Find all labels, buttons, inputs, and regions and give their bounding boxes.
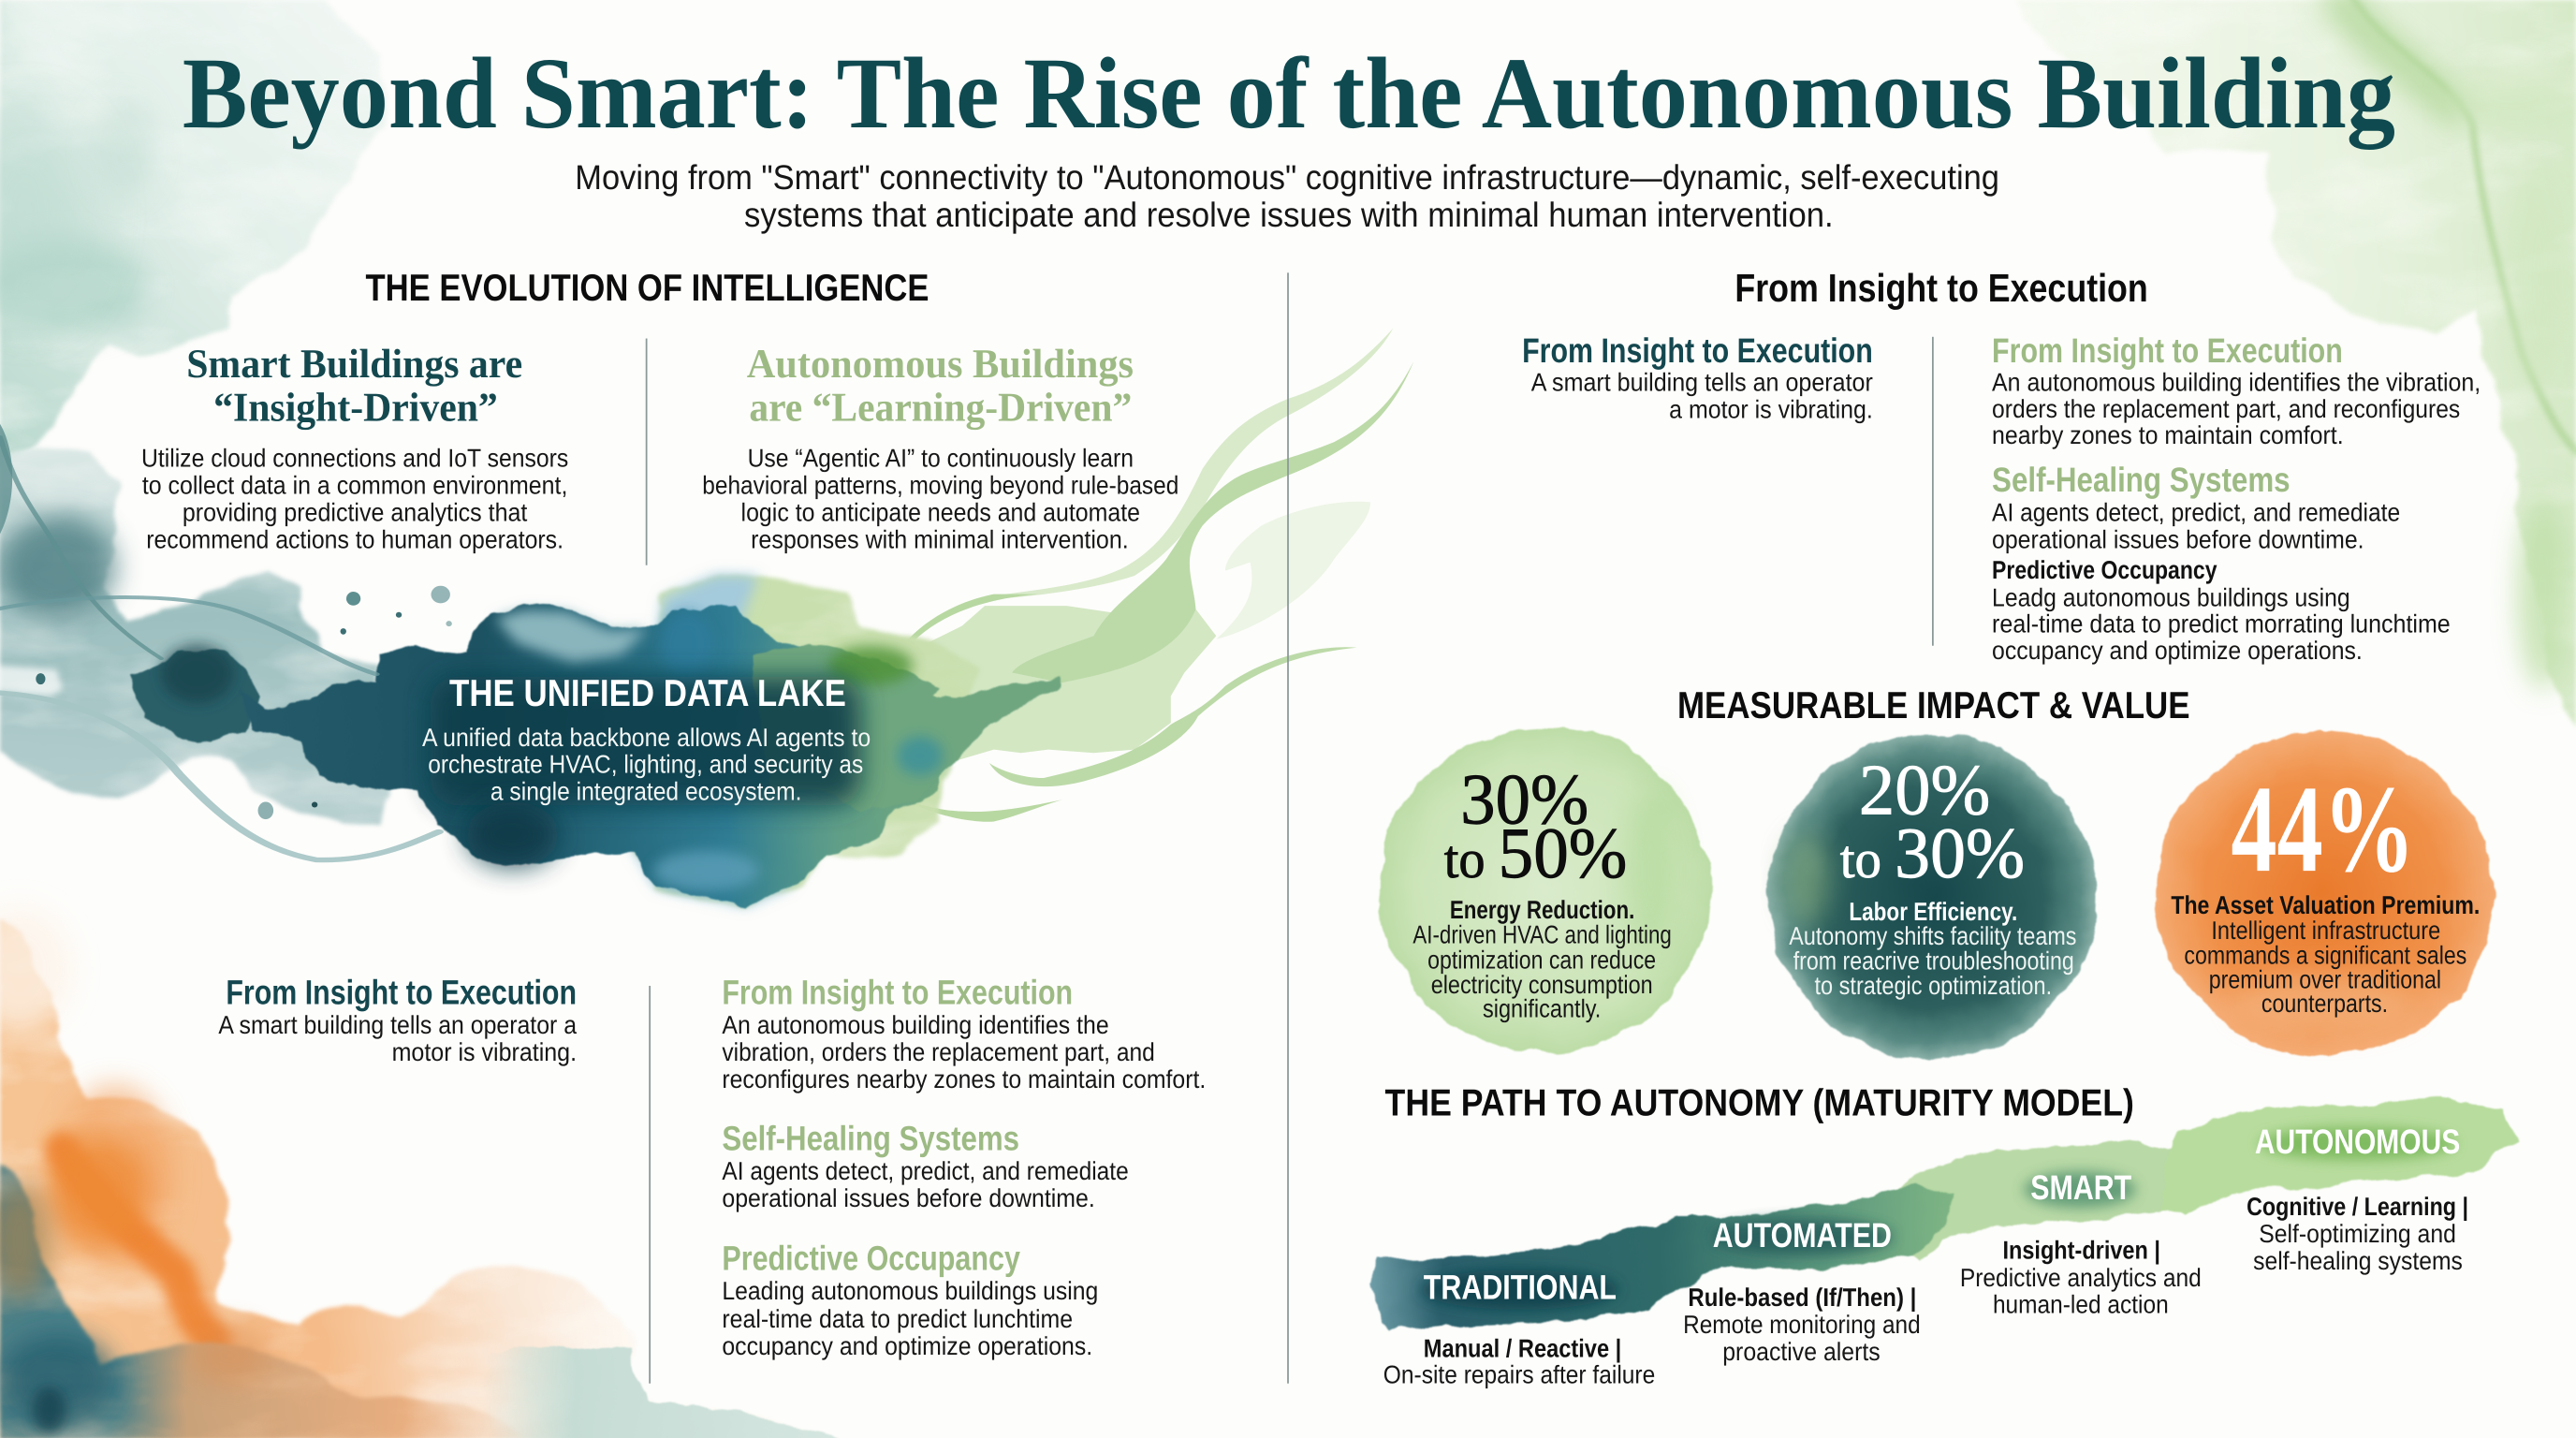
stat circle: labor efficiency: from reacrive troubleshooting	[1793, 948, 2074, 976]
left edge lens	[0, 424, 12, 534]
text: smart buildings body: Utilize cloud connections and IoT sensors	[141, 446, 569, 473]
text: smart building example: A smart building tells an operator	[1531, 370, 1873, 398]
text: unified data lake body	[422, 725, 871, 807]
panel: upper right insight to execution	[1522, 267, 2481, 666]
text: autonomous execution: An autonomous building identifies the vibration,	[1992, 370, 2481, 398]
stat circle: labor efficiency: Autonomy shifts facility teams	[1789, 923, 2077, 951]
text: smart buildings body	[141, 446, 569, 554]
text: smart building example: From Insight to Execution	[1522, 332, 1873, 371]
stat circle: energy reduction: Energy Reduction.	[1450, 897, 1634, 925]
stat circle: energy reduction: AI-driven HVAC and lighting	[1412, 922, 1672, 949]
watercolor: unified data lake blob	[0, 424, 1061, 908]
stage: smart: Predictive analytics and	[1960, 1265, 2202, 1293]
stage: autonomous: Self-optimizing and	[2259, 1221, 2456, 1249]
text: predictive occupancy: occupancy and optimize operations.	[722, 1333, 1092, 1361]
ribbon: upper pale	[994, 329, 1393, 599]
gap left	[0, 665, 63, 696]
text: predictive occupancy	[1992, 557, 2451, 666]
ribbon: pale right leaf	[1216, 502, 1370, 639]
text: smart buildings body: to collect data in a common environment,	[142, 473, 567, 500]
text: smart building example: a motor is vibrating.	[1669, 397, 1873, 425]
heading: autonomous buildings: Autonomous Buildings	[747, 343, 1134, 387]
panel: evolution of intelligence	[141, 266, 1178, 565]
lake top lobe	[495, 610, 648, 663]
stat circle: asset valuation: The Asset Valuation Premium.	[2171, 892, 2480, 920]
text: unified data lake body: A unified data backbone allows AI agents to	[422, 725, 871, 753]
stage: autonomous: self-healing systems	[2253, 1248, 2463, 1276]
subtitle: Moving from "Smart" connectivity to "Autonomous" cognitive infrastructure—dynamic, self-executing	[575, 159, 1999, 198]
stage: traditional: TRADITIONAL	[1424, 1269, 1617, 1307]
stage: autonomous	[2247, 1123, 2468, 1276]
path band	[1370, 1100, 2516, 1331]
text: self-healing systems: AI agents detect, predict, and remediate	[722, 1158, 1129, 1186]
text: predictive occupancy: real-time data to predict morrating lunchtime	[1992, 611, 2451, 639]
stat circle: asset valuation: commands a significant sales	[2184, 943, 2467, 970]
dark left strip	[0, 514, 117, 620]
text: unified data lake body: orchestrate HVAC, lighting, and security as	[428, 752, 864, 780]
heading: from insight to execution: From Insight to Execution	[1734, 267, 2148, 312]
stat circle: labor efficiency	[1767, 734, 2097, 1060]
text: autonomous execution: From Insight to Execution	[1992, 332, 2343, 371]
stage: autonomous: Cognitive / Learning |	[2247, 1194, 2468, 1222]
text: unified data lake body: a single integrated ecosystem.	[490, 779, 801, 807]
text: self-healing systems: Self-Healing Systems	[722, 1121, 1019, 1158]
stat circle: asset valuation: counterparts.	[2261, 990, 2388, 1019]
panel: measurable impact and value	[1380, 683, 2494, 1060]
stage: traditional: Manual / Reactive |	[1424, 1336, 1621, 1364]
stage: automated: proactive alerts	[1722, 1339, 1881, 1367]
text: autonomous execution: From Insight to Execution	[722, 975, 1073, 1012]
stat circle: energy reduction: to 50%	[1444, 814, 1627, 894]
panel: lower left insight to execution	[218, 975, 1206, 1384]
text: smart building example	[218, 975, 578, 1067]
stat circle: asset valuation	[2156, 731, 2494, 1056]
stat circle: energy reduction: optimization can reduce	[1427, 947, 1656, 976]
stat circle: labor efficiency: to strategic optimization.	[1815, 973, 2052, 1001]
text: autonomous execution: reconfigures nearby zones to maintain comfort.	[722, 1066, 1206, 1094]
subtitle	[575, 159, 1999, 235]
text: self-healing systems: operational issues before downtime.	[1992, 526, 2364, 554]
subtitle: systems that anticipate and resolve issues with minimal human intervention.	[744, 198, 1834, 235]
panel: unified data lake text	[422, 671, 871, 807]
text: smart building example: From Insight to Execution	[226, 975, 577, 1012]
stat circle: energy reduction: significantly.	[1483, 996, 1601, 1023]
text: autonomous buildings body: logic to anticipate needs and automate	[741, 500, 1140, 527]
text: predictive occupancy: occupancy and optimize operations.	[1992, 638, 2363, 666]
text: autonomous execution: orders the replacement part, and reconfigures	[1992, 396, 2461, 424]
lake green wedge	[754, 642, 1061, 814]
stat circle: labor efficiency: 20%	[1859, 750, 1990, 830]
text: smart buildings body: recommend actions to human operators.	[146, 526, 564, 554]
pale blue crown	[633, 574, 812, 907]
text: self-healing systems: AI agents detect, predict, and remediate	[1992, 500, 2400, 527]
stage: automated: Rule-based (If/Then) |	[1688, 1284, 1916, 1313]
lake text halo	[431, 677, 861, 805]
ribbon: lower	[989, 647, 1357, 786]
heading: autonomous buildings	[747, 343, 1134, 431]
ribbon: thin arc	[900, 594, 1039, 653]
stage: traditional	[1383, 1269, 1655, 1390]
stat circle: asset valuation: 44%	[2231, 761, 2415, 899]
stage: automated: Remote monitoring and	[1683, 1312, 1921, 1340]
ribbon: lake base wash	[908, 572, 1216, 763]
lake dark body	[239, 606, 936, 907]
stat circle: asset valuation: Intelligent infrastructure	[2211, 917, 2440, 946]
text: smart building example: A smart building tells an operator a	[218, 1012, 578, 1040]
text: smart buildings body: providing predictive analytics that	[183, 500, 528, 527]
teal thin ribbons	[0, 437, 439, 860]
stage: smart: human-led action	[1993, 1291, 2169, 1319]
watercolor ribbons: green	[899, 329, 1413, 822]
text: autonomous buildings body: responses with minimal intervention.	[751, 526, 1129, 554]
stat circle: labor efficiency: to 30%	[1840, 814, 2025, 894]
text: autonomous execution: An autonomous building identifies the	[722, 1012, 1109, 1040]
pale green crown	[633, 573, 979, 908]
title: Beyond Smart: The Rise of the Autonomous Building	[183, 38, 2395, 151]
text: self-healing systems	[1992, 462, 2400, 554]
watercolor wash: top left	[0, 0, 385, 469]
text: predictive occupancy: Leadg autonomous buildings using	[1992, 585, 2350, 613]
stage: smart	[1960, 1170, 2202, 1319]
text: predictive occupancy: Leading autonomous buildings using	[722, 1278, 1098, 1306]
watercolor wash: bottom left	[0, 907, 841, 1438]
text: autonomous buildings body: Use “Agentic AI” to continuously learn	[748, 446, 1134, 473]
heading: smart buildings	[186, 343, 522, 431]
text: self-healing systems	[722, 1121, 1129, 1213]
text: predictive occupancy: Predictive Occupancy	[722, 1240, 1020, 1278]
text: smart building example	[1522, 332, 1873, 425]
text: autonomous execution: vibration, orders the replacement part, and	[722, 1039, 1155, 1067]
text: smart building example: motor is vibrating.	[392, 1039, 577, 1067]
stat circle: labor efficiency: Labor Efficiency.	[1849, 899, 2017, 927]
stat circle: energy reduction: 30%	[1460, 759, 1588, 840]
left teal wash	[0, 449, 382, 824]
watercolor wash: top right	[2014, 0, 2576, 764]
stage: smart: SMART	[2030, 1170, 2131, 1208]
heading: smart buildings: “Insight-Driven”	[213, 386, 498, 431]
dark patch	[131, 649, 256, 742]
stat circle: energy reduction	[1380, 726, 1708, 1051]
heading: autonomous buildings: are “Learning-Driven”	[749, 386, 1132, 431]
heading: evolution of intelligence: THE EVOLUTION OF INTELLIGENCE	[366, 266, 929, 309]
text: self-healing systems: operational issues before downtime.	[722, 1185, 1095, 1213]
paint droplets	[36, 586, 452, 819]
text: predictive occupancy: real-time data to predict lunchtime	[722, 1306, 1073, 1334]
stage: autonomous: AUTONOMOUS	[2255, 1123, 2460, 1162]
stage: automated: AUTOMATED	[1713, 1217, 1892, 1255]
ribbon: main medium green	[1012, 361, 1413, 682]
heading: measurable impact: MEASURABLE IMPACT & VALUE	[1677, 683, 2190, 726]
heading: unified data lake: THE UNIFIED DATA LAKE	[449, 671, 846, 714]
text: predictive occupancy: Predictive Occupancy	[1992, 557, 2217, 585]
text: autonomous execution: nearby zones to maintain comfort.	[1992, 422, 2344, 450]
center divider	[1287, 272, 1289, 1384]
heading: smart buildings: Smart Buildings are	[186, 343, 522, 387]
text: autonomous buildings body: behavioral patterns, moving beyond rule-based	[702, 473, 1178, 500]
text: autonomous execution	[1992, 332, 2481, 450]
ribbon: tail	[899, 797, 1061, 822]
text: self-healing systems: Self-Healing Systems	[1992, 462, 2291, 500]
stat circle: energy reduction: electricity consumption	[1431, 972, 1653, 1000]
stage: traditional: On-site repairs after failure	[1383, 1362, 1655, 1390]
text: autonomous buildings body	[702, 446, 1178, 554]
stage: automated	[1683, 1217, 1921, 1367]
stage: smart: Insight-driven |	[2002, 1238, 2160, 1265]
text: autonomous execution	[722, 975, 1206, 1094]
heading: path to autonomy: THE PATH TO AUTONOMY (MATURITY MODEL)	[1385, 1081, 2134, 1123]
stat circle: asset valuation: premium over traditional	[2209, 967, 2441, 995]
text: predictive occupancy	[722, 1240, 1098, 1361]
panel: path to autonomy maturity model	[1370, 1081, 2516, 1390]
